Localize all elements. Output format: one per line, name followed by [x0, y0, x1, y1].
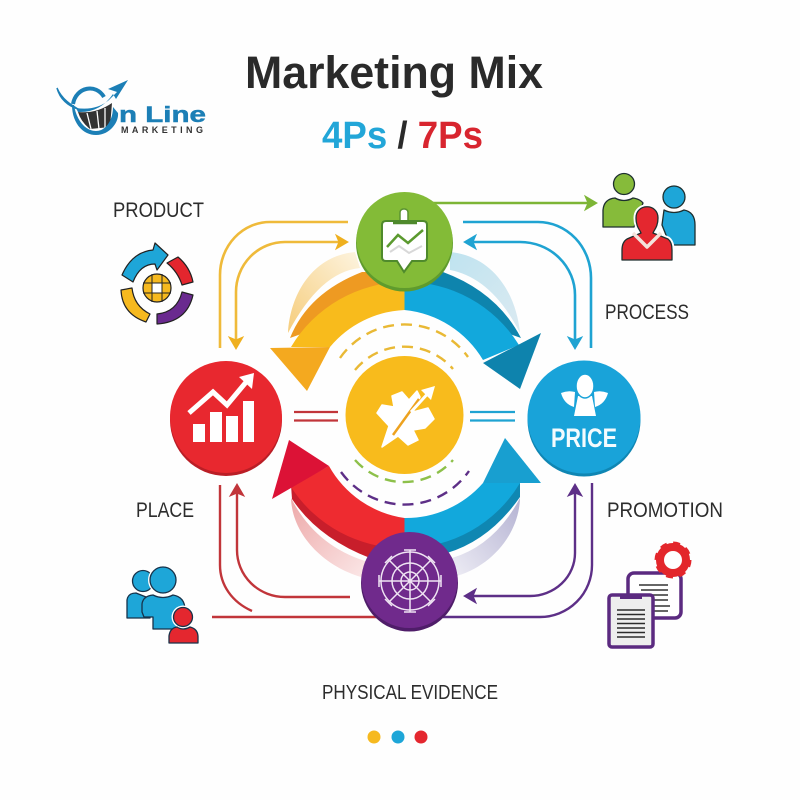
node: green top: [356, 192, 453, 292]
title: Marketing Mix: [245, 47, 543, 98]
icon: leaf with arrow: [377, 386, 435, 447]
connector: red double line: [294, 412, 338, 420]
dashed arcs: yellow top: [340, 324, 468, 370]
logo: On Line Marketing: [57, 80, 206, 135]
icon: chart pin: [382, 209, 427, 272]
icon: people group (top right): [603, 174, 695, 260]
label: product: PRODUCT: [113, 199, 204, 222]
arrow: green to people: [432, 196, 597, 210]
arrows: yellow top-left pair: [220, 222, 348, 349]
logo: On Line Marketing: MARKETING: [121, 125, 203, 135]
node: center yellow: [346, 356, 464, 474]
label: place: PLACE: [136, 499, 194, 522]
pagination dots: [368, 730, 428, 744]
cycle band: yellow top-left: [270, 252, 405, 391]
arrows: blue top-right pair: [463, 222, 591, 349]
cycle band: blue bottom-right: [404, 438, 541, 577]
node: purple bottom: [361, 532, 458, 632]
arrows: red bottom-left: [212, 484, 378, 617]
dashed arcs: green and purple bottom: [341, 460, 469, 505]
text: PRICE: PRICE: [551, 423, 617, 453]
connector: blue double line: [470, 412, 515, 420]
label: physical evidence: PHYSICAL EVIDENCE: [322, 682, 498, 704]
icon: rising bar chart: [189, 373, 254, 442]
icon: people with red person (bottom left): [127, 565, 198, 643]
label: promotion: PROMOTION: [607, 499, 723, 522]
node: blue right (price): [528, 360, 640, 476]
icon: product cycle with globe: [121, 243, 193, 324]
logo: On Line Marketing: n Line: [119, 102, 206, 127]
label: process: PROCESS: [605, 301, 689, 324]
node: red left: [170, 361, 282, 476]
cycle band: blue top-right: [404, 252, 541, 389]
icon: documents with gear: [609, 544, 689, 647]
cycle band: red bottom-left: [272, 440, 405, 578]
icon: winged figure: [561, 374, 608, 416]
arrows: purple bottom-right: [443, 483, 592, 617]
icon: radar: [379, 550, 441, 612]
subtitle: 4Ps / 7Ps: 4Ps / 7Ps: [322, 115, 483, 157]
